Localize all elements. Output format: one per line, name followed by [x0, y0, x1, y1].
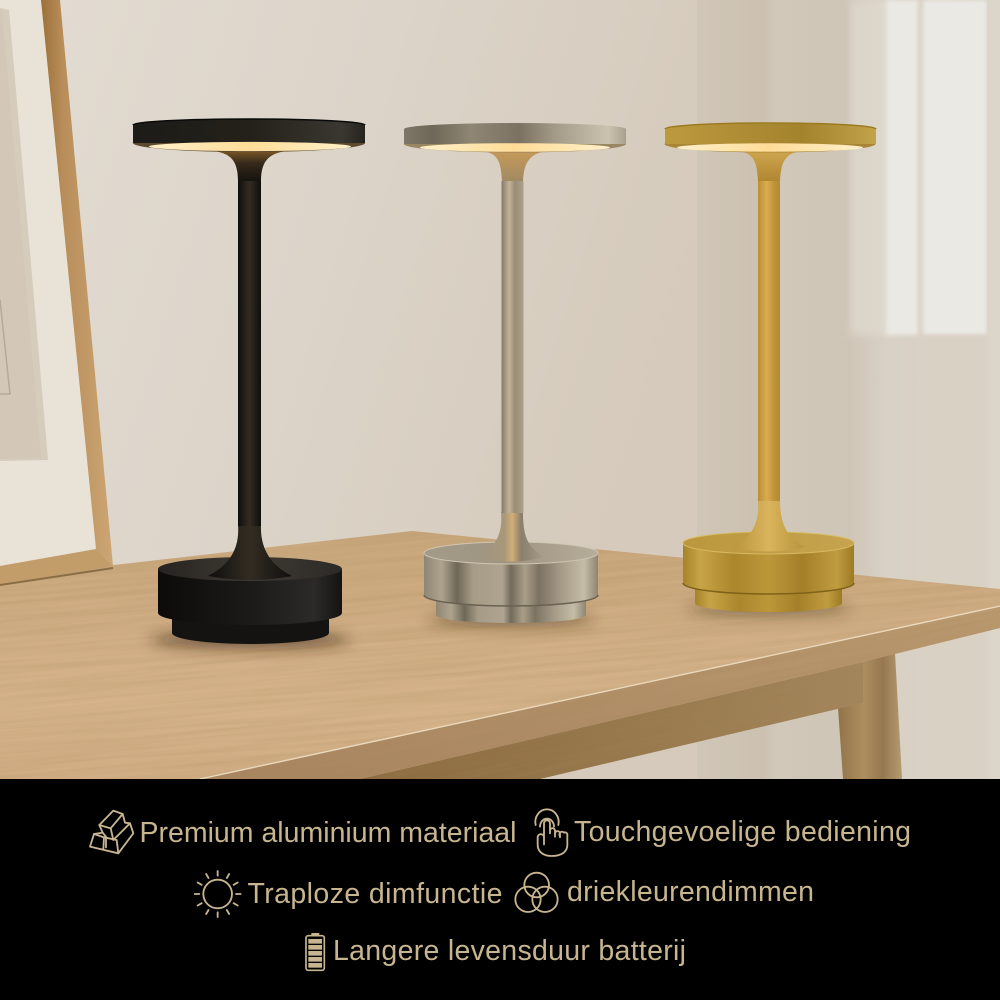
wall background: [0, 0, 700, 779]
lamp shadows: [150, 602, 851, 649]
feature: touch control: Touchgevoelige bediening: [574, 816, 911, 848]
feature: longer battery life: Langere levensduur batterij: [333, 935, 686, 967]
icon: battery: [306, 933, 324, 970]
lamp: gold: [664, 123, 876, 612]
black lamp stem: [238, 181, 261, 526]
gold lamp base: [683, 500, 854, 612]
icon: touch hand: [535, 809, 567, 856]
icon: gold bars: [90, 811, 133, 853]
picture frame: [0, 0, 113, 585]
lamp: silver: [404, 123, 626, 623]
feature: premium material: Premium aluminium materiaal: [140, 817, 516, 849]
icon: sun: [195, 871, 241, 917]
gold lamp head: [664, 123, 876, 181]
feature: stepless dimming: Traploze dimfunctie: [248, 878, 502, 910]
silver lamp stem: [502, 181, 524, 513]
feature band: [0, 779, 1000, 1000]
wood grain: [0, 533, 950, 766]
gold lamp stem: [758, 181, 780, 501]
silver lamp head: [404, 123, 626, 181]
black lamp base: [158, 525, 342, 644]
lamp: black: [133, 119, 365, 644]
table legs and apron: [200, 606, 1000, 779]
silver lamp base: [424, 512, 598, 623]
curtain: [697, 0, 1000, 779]
black lamp head: [133, 119, 365, 181]
table top: [0, 531, 1000, 779]
feature: three colour dimming: driekleurendimmen: [567, 876, 814, 908]
icon: three circles: [515, 873, 558, 912]
